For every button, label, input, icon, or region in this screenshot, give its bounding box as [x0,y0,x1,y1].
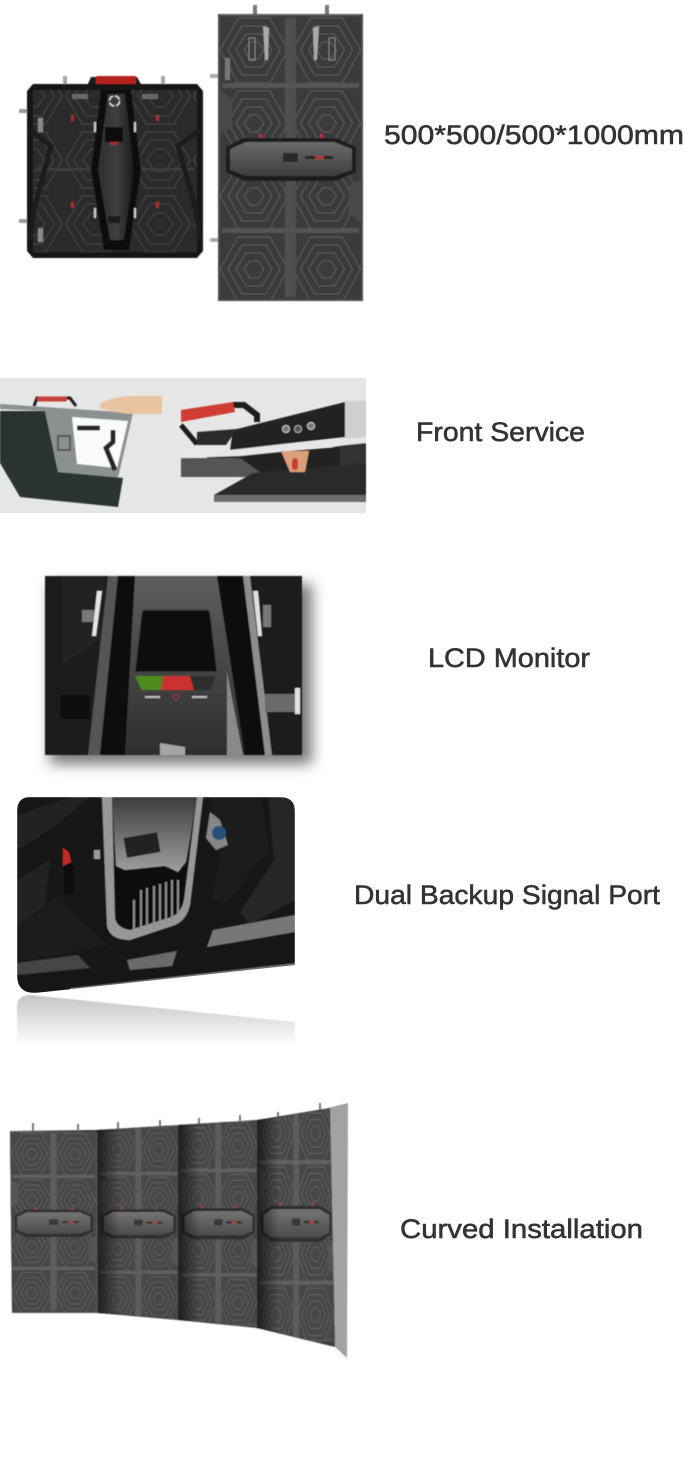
red latch [63,848,71,866]
fingers [281,451,309,472]
clips [82,591,271,636]
tall 500x1000 cabinet [210,5,363,301]
locating pins [19,76,165,223]
label: lcd monitor: LCD Monitor [428,643,590,673]
metal plate [345,401,366,443]
carry handle [87,76,142,86]
cabling [77,428,115,470]
cabinet 1 [10,1125,98,1320]
right photo: module detail [181,401,366,502]
label: dual backup signal port: Dual Backup Signal Port [354,880,661,910]
right dark panels [250,576,302,755]
open window [72,417,128,468]
label: front service: Front Service [416,417,585,447]
lcd screen [135,610,217,672]
usb tag [160,743,185,755]
connector [163,867,164,868]
panel: lcd monitor [45,576,312,764]
photo [45,576,302,755]
reflection [17,995,295,1045]
label: size: 500*500/500*1000mm [384,120,684,150]
panel: curved installation [10,1103,643,1358]
panel: front service [0,378,585,513]
gray frame [0,404,133,478]
status lamps [135,676,216,690]
machinery behind [333,441,366,470]
panel: size [19,5,684,301]
lower LED module [214,463,366,502]
drop shadow [50,584,312,764]
dark backing behind cabinet seams [10,1108,335,1347]
curved wall of cabinets [10,1103,348,1358]
lcd window [105,127,123,142]
photo background [0,378,366,513]
signal port [206,812,228,850]
square 500x500 cabinet [19,76,203,258]
handle [232,405,257,422]
centre spine [91,90,141,250]
left photo: hand lifting module [0,396,162,507]
side strip [328,1103,348,1358]
photo [17,797,295,993]
central housing outer rim [102,797,203,940]
panel: dual backup signal port [17,797,661,1045]
cooling fins [134,880,178,930]
label: curved installation: Curved Installation [400,1214,643,1244]
housing inner black [112,797,197,930]
cabinet 4 [257,1103,335,1350]
cabinet 2 [97,1120,180,1325]
top locating pins [33,1103,320,1131]
hand [130,396,162,414]
cabinet 3 [178,1118,258,1333]
module dark face [0,411,123,507]
centre body [125,576,245,755]
red handle [34,398,76,406]
upper body [112,797,197,872]
top pins [210,5,329,242]
lamp captions [145,694,207,700]
white plate edge [181,437,366,458]
lower frame [17,955,90,975]
metal bracket [230,402,345,450]
cabinet body [27,84,203,258]
